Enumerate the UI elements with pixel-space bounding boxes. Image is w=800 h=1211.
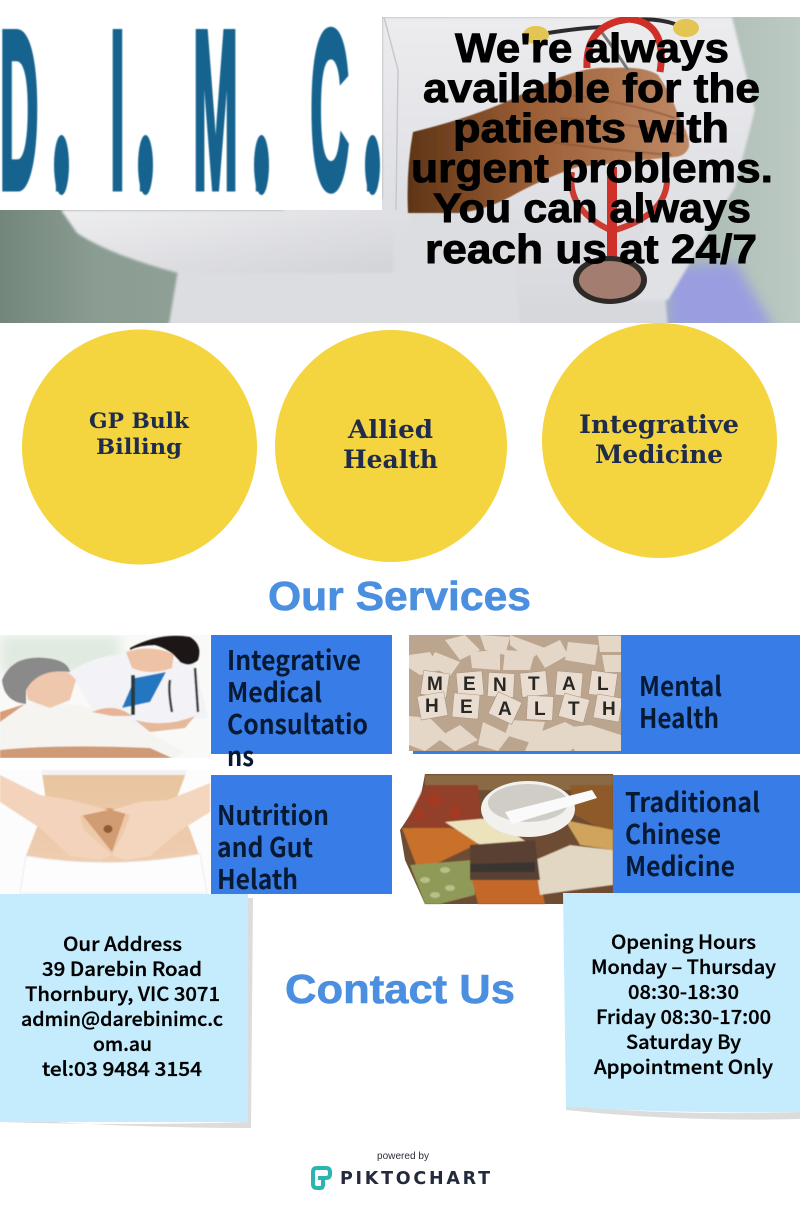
headline: reach us at 24/7 bbox=[425, 226, 757, 272]
panel: opening hours: Appointment Only bbox=[594, 1051, 773, 1080]
service photo: scrabble tiles spelling mental health: E bbox=[463, 674, 476, 695]
service box: Mental Health: Health bbox=[639, 697, 719, 736]
service box: Integrative Medical Consultations: Integrative bbox=[227, 639, 361, 678]
panel: opening hours: Friday 08:30-17:00 bbox=[596, 1001, 771, 1030]
panel: opening hours: Monday – Thursday bbox=[591, 951, 776, 980]
service photo: scrabble tiles spelling mental health: A bbox=[562, 674, 576, 695]
service photo: scrabble tiles spelling mental health: L bbox=[597, 674, 609, 695]
service box: Integrative Medical Consultations: Consultatio bbox=[227, 703, 368, 742]
service photo: scrabble tiles spelling mental health: A bbox=[498, 699, 512, 720]
service box: Mental Health: Mental bbox=[639, 665, 722, 704]
service box: Traditional Chinese Medicine bbox=[613, 775, 800, 893]
forearm and hand bbox=[408, 68, 689, 213]
service photo: scrabble tiles spelling mental health: L bbox=[534, 699, 546, 720]
service photo: scrabble tiles spelling mental health bbox=[409, 635, 623, 751]
service box: Nutrition and Gut Health: and Gut bbox=[217, 826, 313, 865]
periwinkle light patch bbox=[668, 262, 775, 330]
icon: Piktochart logo bbox=[313, 1168, 330, 1188]
service box: Traditional Chinese Medicine: Chinese bbox=[625, 813, 721, 852]
service photo: scrabble tiles spelling mental health: M bbox=[427, 674, 443, 695]
service photo: scrabble tiles spelling mental health: H bbox=[602, 699, 616, 720]
doctor coat bbox=[61, 17, 755, 330]
service photo: scrabble tiles spelling mental health: H bbox=[425, 696, 439, 717]
stethoscope bbox=[548, 19, 675, 33]
service photo: scrabble tiles spelling mental health: E bbox=[460, 697, 473, 718]
service box: Mental Health bbox=[413, 635, 800, 754]
hero banner photo: doctor holding stethoscope bbox=[0, 17, 800, 330]
circle: Allied Health bbox=[275, 330, 507, 562]
headline: available for the bbox=[423, 65, 760, 111]
service box: Nutrition and Gut Health: Nutrition bbox=[217, 794, 329, 833]
panel: address: Thornbury, VIC 3071 bbox=[25, 978, 220, 1007]
panel: address: admin@darebinimc.c bbox=[21, 1003, 223, 1032]
service photo: doctor and patient bbox=[0, 635, 210, 758]
service photo: Chinese herbs with mortar and pestle bbox=[400, 774, 613, 904]
headline: urgent problems. bbox=[411, 145, 773, 191]
service box: Traditional Chinese Medicine: Traditional bbox=[625, 781, 760, 820]
service box: Nutrition and Gut Health: Helath bbox=[217, 858, 298, 897]
circle: GP Bulk Billing bbox=[22, 330, 257, 564]
headline bbox=[411, 25, 773, 272]
service box: Integrative Medical Consultations: Medical bbox=[227, 671, 322, 710]
service photo: scrabble tiles spelling mental health: T bbox=[528, 674, 540, 695]
heading: Contact Us: Contact Us bbox=[285, 966, 515, 1012]
service photo: scrabble tiles spelling mental health: N bbox=[493, 675, 507, 696]
circle: GP Bulk Billing: GP Bulk bbox=[89, 408, 189, 433]
service box: Integrative Medical Consultations bbox=[211, 635, 392, 774]
panel: opening hours bbox=[563, 893, 800, 1120]
heading: Our Services: Our Services bbox=[268, 573, 531, 619]
panel: opening hours: Saturday By bbox=[626, 1026, 741, 1055]
headline: patients with bbox=[453, 105, 729, 151]
headline: We're always bbox=[455, 25, 729, 71]
panel: address: om.au bbox=[93, 1028, 152, 1057]
circle: Integrative Medicine: Medicine bbox=[595, 440, 723, 469]
service box: Traditional Chinese Medicine: Medicine bbox=[625, 845, 735, 884]
circle: Allied Health: Allied bbox=[347, 415, 433, 444]
panel: opening hours: 08:30-18:30 bbox=[628, 976, 739, 1005]
footer: powered by Piktochart bbox=[313, 1151, 490, 1189]
panel: address: Our Address bbox=[63, 928, 182, 957]
circle: Integrative Medicine bbox=[542, 323, 777, 558]
service photo: scrabble tiles spelling mental health: T bbox=[568, 699, 580, 720]
footer: powered by Piktochart: PIKTOCHART bbox=[340, 1169, 490, 1189]
panel: address: tel:03 9484 3154 bbox=[42, 1053, 202, 1082]
service box: Nutrition and Gut Health bbox=[211, 775, 392, 897]
patient bbox=[4, 704, 169, 757]
circle: GP Bulk Billing: Billing bbox=[96, 434, 182, 459]
footer: powered by Piktochart: powered by bbox=[377, 1151, 429, 1162]
doctor coat bbox=[70, 654, 200, 716]
panel: address: 39 Darebin Road bbox=[42, 953, 202, 982]
circle: Allied Health: Health bbox=[343, 445, 438, 474]
circle: Integrative Medicine: Integrative bbox=[579, 410, 739, 439]
panel: address bbox=[0, 894, 253, 1128]
headline: You can always bbox=[433, 185, 751, 231]
service photo: abdomen with heart-shaped hands bbox=[0, 770, 210, 893]
service box: Integrative Medical Consultations: ns bbox=[227, 735, 254, 774]
panel: opening hours: Opening Hours bbox=[611, 926, 756, 955]
